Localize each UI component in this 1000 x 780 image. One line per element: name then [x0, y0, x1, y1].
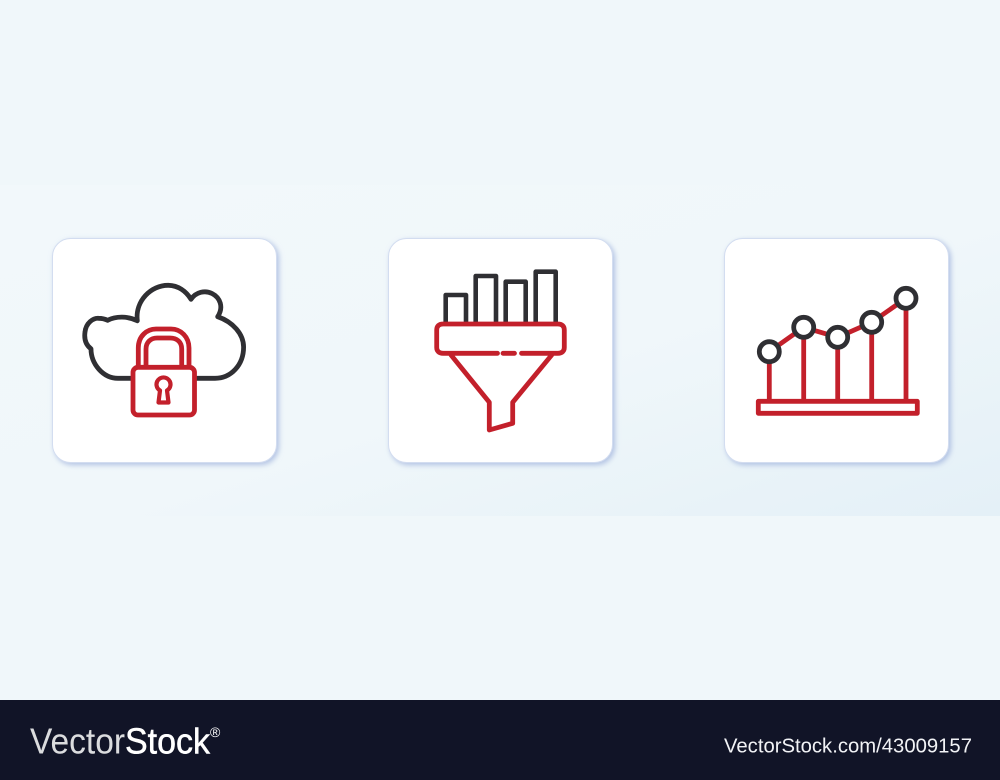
panel: cloud lock card	[52, 238, 276, 462]
panel: line chart card	[724, 238, 948, 462]
icon: chart points	[759, 288, 916, 362]
icon: bars	[446, 272, 556, 323]
logo: VectorStock: Stock	[125, 720, 211, 762]
panel: funnel card	[388, 238, 612, 462]
icon: cloud outline	[85, 285, 244, 378]
image id: VectorStock.com/43009157	[724, 736, 972, 758]
logo: VectorStock: Vector	[30, 720, 125, 762]
icon: padlock	[133, 329, 194, 415]
logo: VectorStock	[30, 720, 211, 762]
logo: registered mark: ®	[210, 724, 221, 740]
icon: chart stems and base	[758, 298, 917, 413]
footer bar	[0, 700, 1000, 780]
icon: funnel	[437, 324, 564, 430]
